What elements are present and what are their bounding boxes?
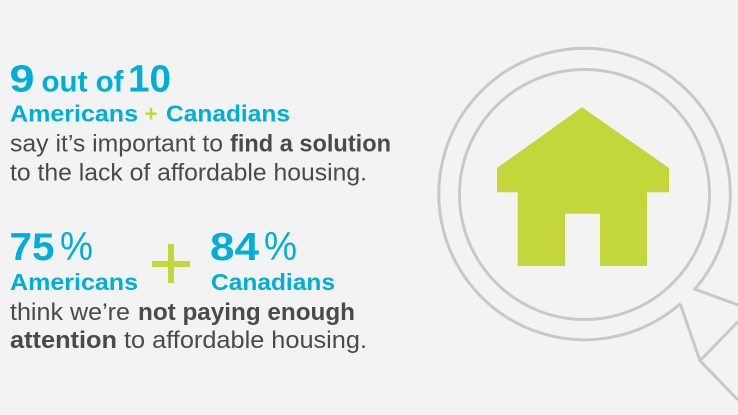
body text: find a solution [10, 130, 391, 186]
icon: green plus [152, 244, 190, 283]
body text: not paying enough attention: to affordable housing. [124, 327, 367, 354]
magnifier inner lens ring [460, 70, 710, 320]
heading: 9 out of 10: 9 [10, 58, 34, 100]
stat: 84% Canadians: Canadians [211, 269, 335, 295]
body text: find a solution: say it’s important to [10, 130, 223, 158]
body text: not paying enough attention [10, 299, 367, 354]
stat: 84% Canadians: 84 [210, 226, 259, 269]
body text: not paying enough attention: think we’re [10, 299, 130, 326]
magnifier outer ring and handle [439, 48, 738, 400]
text block: 9 out of 10 statistic [10, 58, 391, 186]
body text: not paying enough attention: not paying enough [138, 299, 355, 326]
heading: 9 out of 10: out of [42, 66, 124, 98]
subheading: Americans + Canadians: Canadians [166, 100, 290, 126]
stat: 75% Americans: Americans [10, 269, 138, 295]
body text: not paying enough attention: attention [10, 327, 117, 354]
body text: find a solution: find a solution [230, 130, 391, 158]
subheading: Americans + Canadians: Americans [10, 100, 138, 126]
icon: green house [497, 107, 669, 266]
body text: find a solution: to the lack of affordable housing. [10, 160, 367, 186]
heading: 9 out of 10: 10 [128, 58, 171, 100]
stat: 75% Americans: % [60, 225, 93, 269]
subheading: Americans + Canadians: + [144, 100, 158, 126]
stat: 84% Canadians: % [264, 225, 297, 269]
icon: magnifying glass [439, 48, 738, 400]
heading: 9 out of 10 [10, 58, 171, 100]
stat: 75% Americans: 75 [10, 226, 54, 269]
stat: 75% Americans [10, 225, 138, 295]
stat: 84% Canadians [210, 225, 335, 295]
subheading: Americans + Canadians [10, 100, 290, 126]
